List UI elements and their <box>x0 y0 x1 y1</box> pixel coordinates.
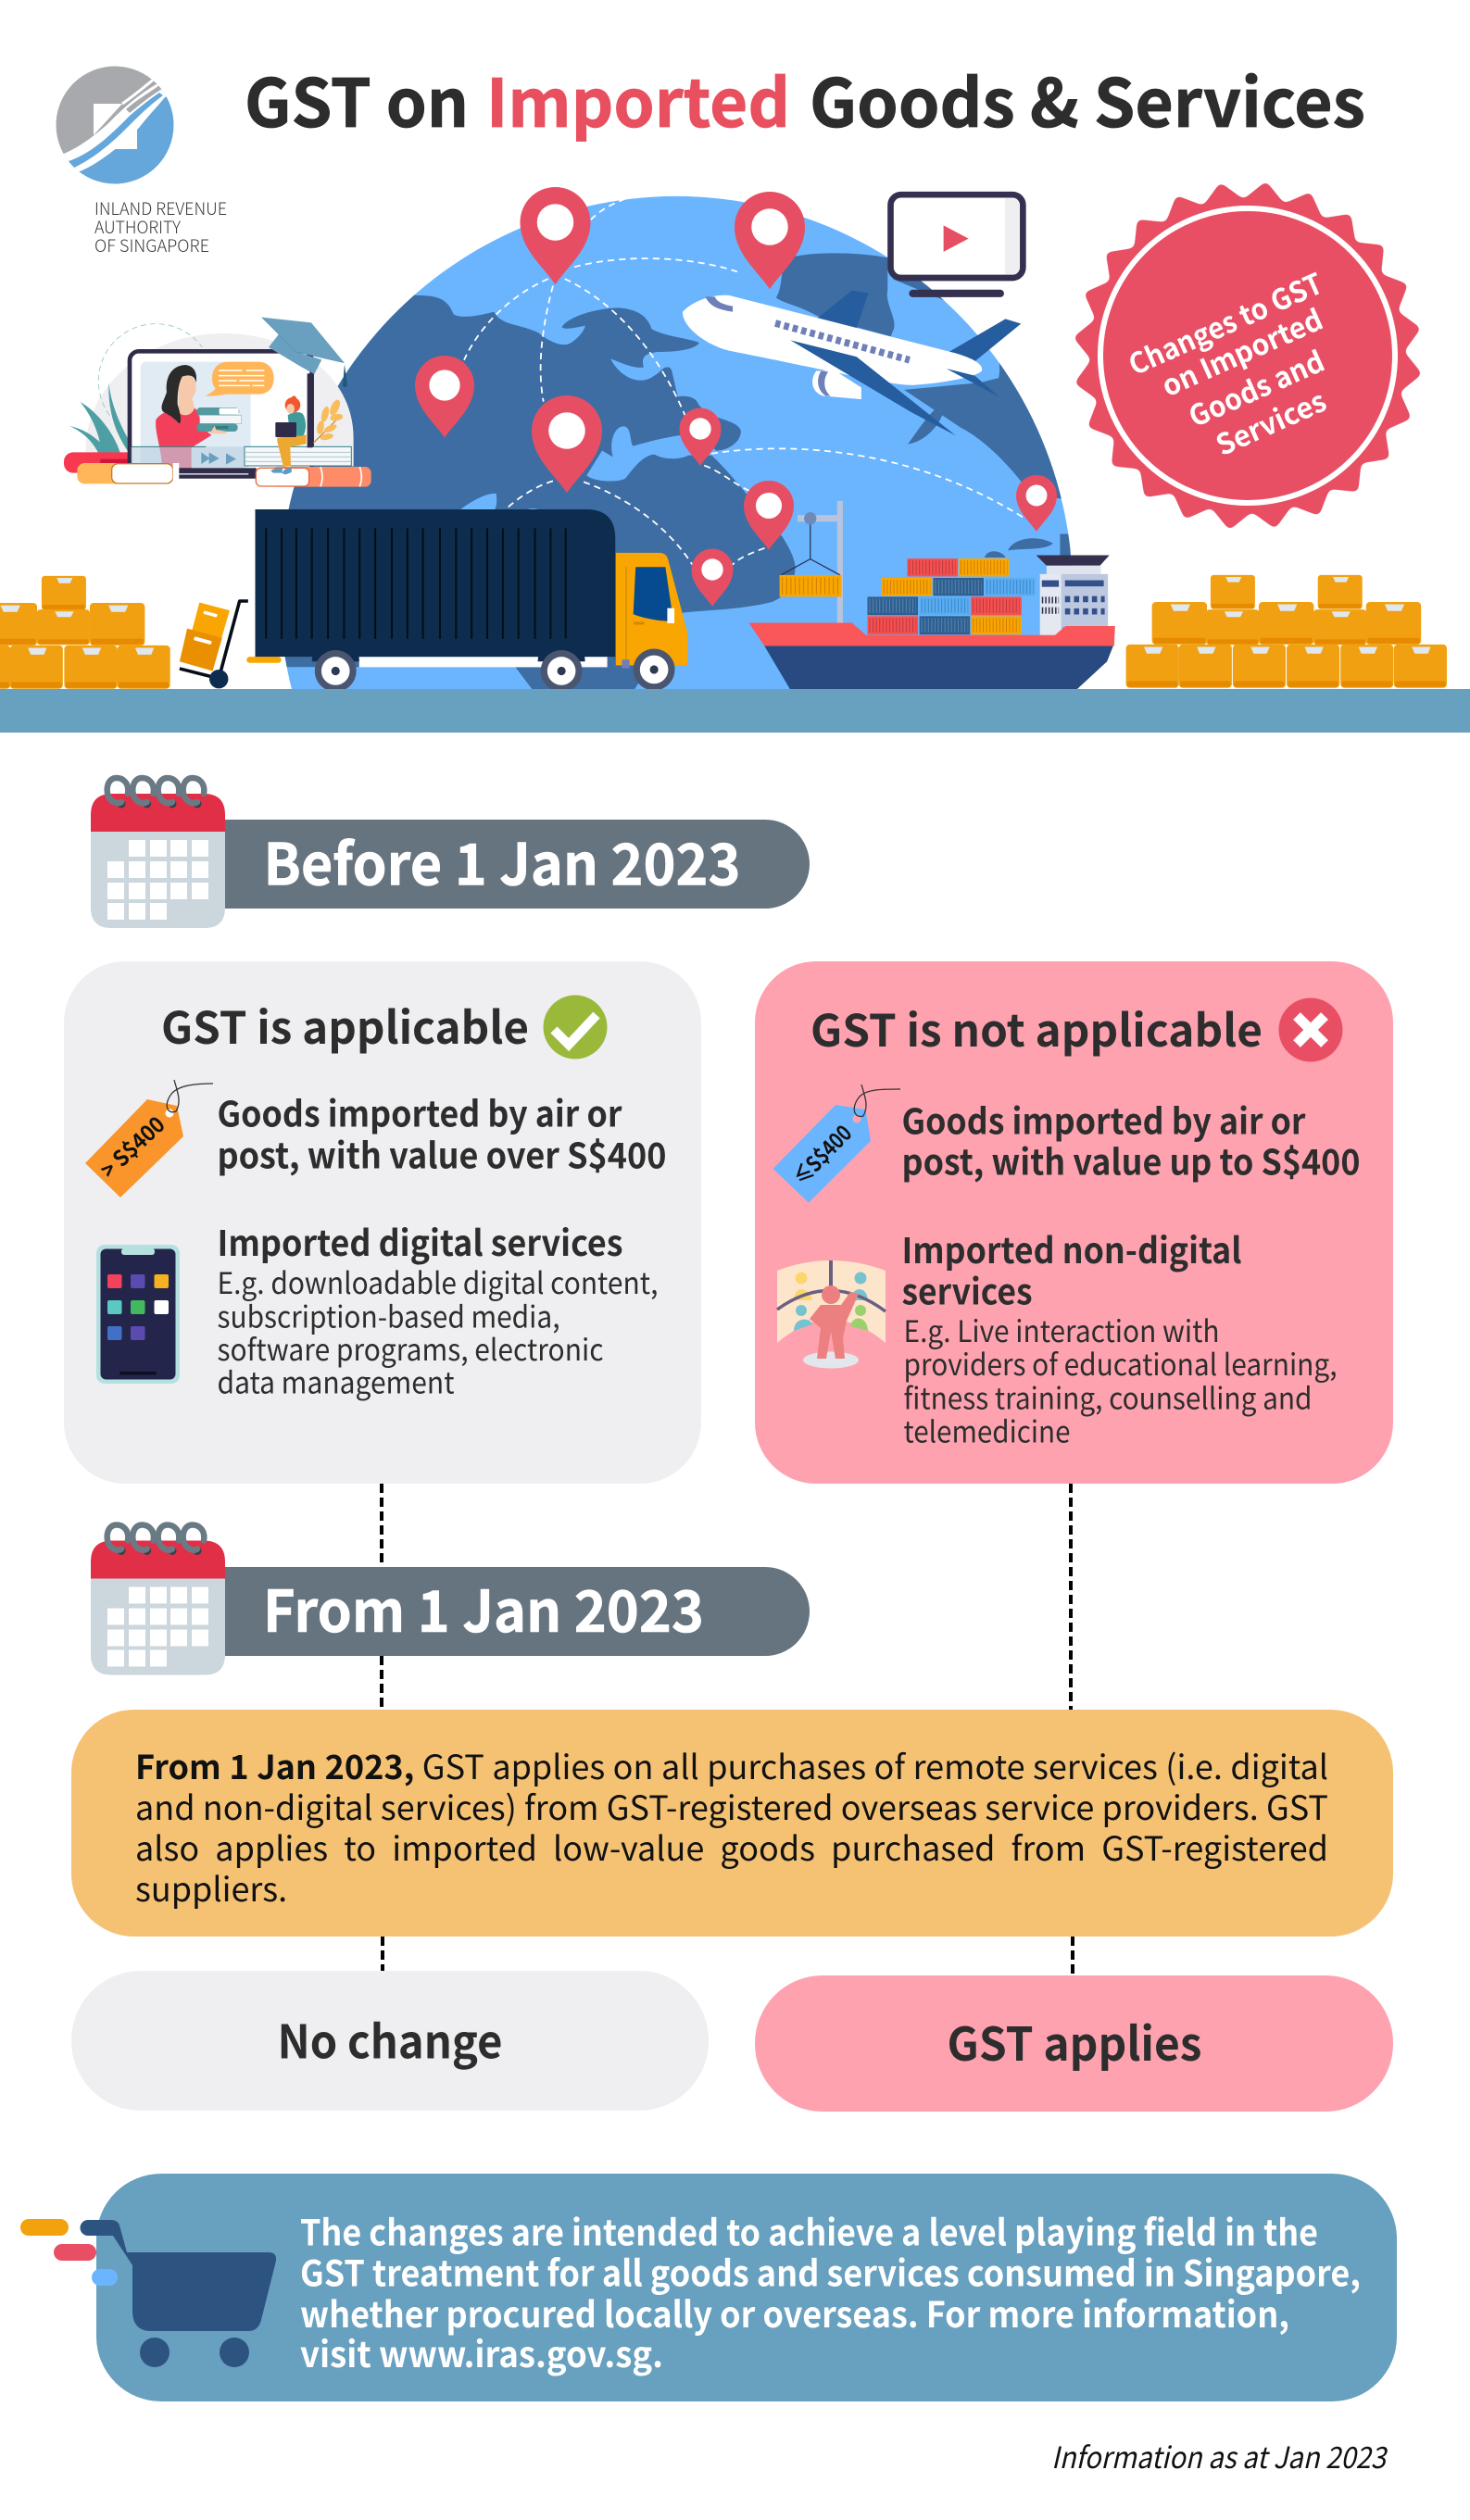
text: closing note: GST treatment for all goods and services consumed in Singapore, <box>300 2245 1361 2297</box>
text: imported digital services: subscription-based media, <box>217 1295 559 1337</box>
panel: GST is applicable <box>64 961 701 1484</box>
title: Imported <box>486 50 790 146</box>
dashed routes <box>464 198 1024 565</box>
text: imported non-digital services: providers of educational learning, <box>904 1342 1338 1385</box>
cargo ship <box>748 501 1115 690</box>
footnote: Information as at Jan 2023 <box>1051 2435 1388 2477</box>
badge: changes to GST: Services <box>1209 378 1332 464</box>
panel heading: GST is applicable: GST is applicable <box>161 992 529 1057</box>
text block: explanation: suppliers. <box>135 1863 287 1912</box>
badge: changes to GST: Goods and <box>1181 338 1330 435</box>
text: imported digital services: software programs, electronic <box>217 1327 604 1370</box>
connector: dashed lines <box>382 1484 1073 1975</box>
heading: before 1 Jan 2023 <box>91 778 810 928</box>
text: goods up to S$400 <box>902 1093 1360 1185</box>
text: closing note <box>300 2204 1361 2378</box>
stack of boxes: left <box>0 576 170 689</box>
text block: explanation <box>135 1745 1330 1912</box>
icon: check mark <box>543 995 608 1059</box>
airplane <box>683 291 1021 435</box>
title: GST on <box>245 50 469 146</box>
text block: explanation: and non-digital services) from GST-registered overseas service providers. GST <box>135 1782 1328 1830</box>
pill: no change: No change <box>278 2006 502 2073</box>
panel: GST is not applicable <box>755 961 1393 1484</box>
text: imported non-digital services: E.g. Live interaction with <box>904 1309 1219 1351</box>
text: imported digital services <box>217 1215 658 1402</box>
text block: explanation: also applies to imported low-value goods purchased from GST-registered <box>135 1823 1328 1871</box>
logo: Inland Revenue Authority of Singapore: OF SINGAPORE <box>94 233 209 257</box>
text: closing note: visit www.iras.gov.sg. <box>300 2326 663 2378</box>
panel heading: GST is not applicable: GST is not applicable <box>810 995 1263 1059</box>
pill: GST applies <box>755 1975 1393 2112</box>
globe illustration <box>247 196 1088 695</box>
icon: blue price tag <box>773 1084 900 1203</box>
logo: Inland Revenue Authority of Singapore: INLAND REVENUE <box>94 196 227 220</box>
text: imported non-digital services: telemedicine <box>904 1410 1071 1452</box>
logo: Inland Revenue Authority of Singapore: AUTHORITY <box>94 215 182 239</box>
heading: from 1 Jan 2023: From 1 Jan 2023 <box>263 1565 704 1649</box>
badge: changes to GST: on Imported <box>1154 296 1328 405</box>
hand trolley with boxes <box>180 601 248 688</box>
badge: changes to GST: Changes to GST <box>1121 260 1328 383</box>
panel: closing note <box>96 2174 1397 2401</box>
text: imported non-digital services: fitness training, counselling and <box>904 1376 1312 1419</box>
location pins <box>415 187 1057 607</box>
pill: no change <box>71 1971 709 2111</box>
stack of boxes: right <box>1126 575 1447 688</box>
text: imported non-digital services <box>902 1222 1338 1452</box>
title <box>245 50 1365 146</box>
icon: smartphone <box>96 1245 180 1384</box>
heading: from 1 Jan 2023 <box>91 1524 810 1674</box>
text: goods over S$400: post, with value over S$400 <box>217 1128 667 1178</box>
text: imported digital services: Imported digital services <box>217 1215 622 1266</box>
pill: GST applies: GST applies <box>947 2008 1202 2075</box>
heading: before 1 Jan 2023: Before 1 Jan 2023 <box>263 819 741 902</box>
text: closing note: The changes are intended to achieve a level playing field in the <box>300 2204 1318 2256</box>
text: goods over S$400 <box>217 1085 667 1178</box>
text: imported digital services: E.g. downloadable digital content, <box>217 1260 658 1303</box>
text: goods up to S$400: post, with value up to S$400 <box>902 1134 1360 1185</box>
text: closing note: whether procured locally or overseas. For more information, <box>300 2287 1289 2338</box>
truck <box>246 509 687 692</box>
e-learning illustration <box>64 318 371 487</box>
icon: video monitor <box>890 194 1023 297</box>
text: goods up to S$400: Goods imported by air or <box>902 1093 1306 1145</box>
badge: changes to GST <box>1055 163 1440 548</box>
icon: shopping cart <box>20 2219 276 2367</box>
icon: live interaction instructor <box>777 1260 886 1369</box>
ground strip <box>0 689 1470 733</box>
text: imported non-digital services: Imported non-digital <box>902 1222 1242 1273</box>
text: imported non-digital services: services <box>902 1263 1032 1315</box>
text: imported digital services: data management <box>217 1360 454 1402</box>
title: Goods & Services <box>810 50 1365 146</box>
icon: orange price tag <box>85 1080 213 1197</box>
panel: from 1 Jan 2023 explanation <box>71 1710 1393 1937</box>
logo: Inland Revenue Authority of Singapore <box>51 60 227 257</box>
icon: orange price tag: > S$400 <box>92 1108 170 1185</box>
icon: cross mark <box>1278 998 1343 1061</box>
text: goods over S$400: Goods imported by air or <box>217 1085 622 1137</box>
icon: blue price tag: ≤S$400 <box>785 1116 858 1191</box>
